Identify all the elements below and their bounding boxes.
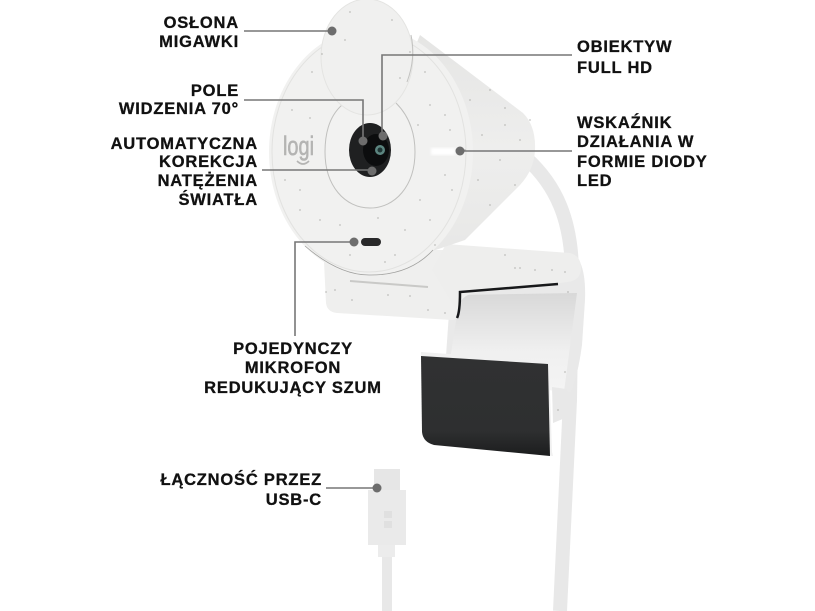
callout: field of view: POLE: [191, 82, 239, 100]
callout: microphone: MIKROFON: [245, 359, 341, 377]
callout: full hd lens: OBIEKTYW: [577, 38, 672, 56]
inner plate shading: [450, 293, 577, 392]
callout: shutter: OSŁONA: [164, 14, 239, 32]
callout: usb-c: [160, 470, 382, 509]
callout: led: DZIAŁANIA W: [577, 133, 694, 151]
callout: light correction: NATĘŻENIA: [158, 172, 258, 190]
callout: field of view: WIDZENIA 70°: [119, 100, 239, 118]
callout: full hd lens: [378, 38, 672, 140]
callout: light correction: KOREKCJA: [159, 153, 258, 171]
callout: led: FORMIE DIODY: [577, 153, 708, 171]
usb-c connector: [368, 469, 406, 611]
speckles: [285, 12, 568, 410]
mount black gap: [457, 284, 558, 318]
callout: led: LED: [577, 172, 612, 190]
callout: microphone: REDUKUJĄCY SZUM: [204, 379, 382, 397]
callout: led: WSKAŹNIK: [577, 113, 672, 132]
callout: microphone: POJEDYNCZY: [233, 340, 353, 358]
lens: [349, 123, 391, 177]
callout: led: [456, 113, 708, 190]
cable: [526, 158, 572, 611]
privacy shutter: [321, 0, 413, 115]
webcam: [269, 0, 585, 456]
face lower edge: [305, 246, 433, 275]
status LED: [431, 148, 455, 155]
lower hinge: [552, 387, 570, 423]
mount shadow: [350, 281, 428, 287]
callout: light correction: ŚWIATŁA: [178, 190, 258, 209]
callout: microphone: [204, 238, 382, 397]
logo: [283, 131, 314, 164]
mount hinge bar: [432, 244, 581, 312]
camera face: [269, 28, 473, 276]
logo: logi: [283, 131, 314, 161]
black clip: [421, 352, 553, 456]
inner ring: [325, 103, 415, 208]
callout: light correction: [111, 135, 376, 209]
callout: full hd lens: FULL HD: [577, 59, 653, 77]
face rim: [272, 32, 466, 272]
camera cone: [372, 35, 535, 262]
callout: field of view: [119, 82, 368, 146]
mount base: [324, 250, 462, 320]
back plate of mount: [445, 262, 585, 392]
callout: shutter: MIGAWKI: [159, 33, 239, 51]
callout: usb-c: USB-C: [266, 491, 322, 509]
callout: usb-c: ŁĄCZNOŚĆ PRZEZ: [160, 470, 322, 489]
callout: light correction: AUTOMATYCZNA: [111, 135, 258, 153]
callout: shutter: [159, 14, 336, 51]
shutter edge: [407, 35, 413, 82]
microphone slot: [361, 238, 381, 246]
